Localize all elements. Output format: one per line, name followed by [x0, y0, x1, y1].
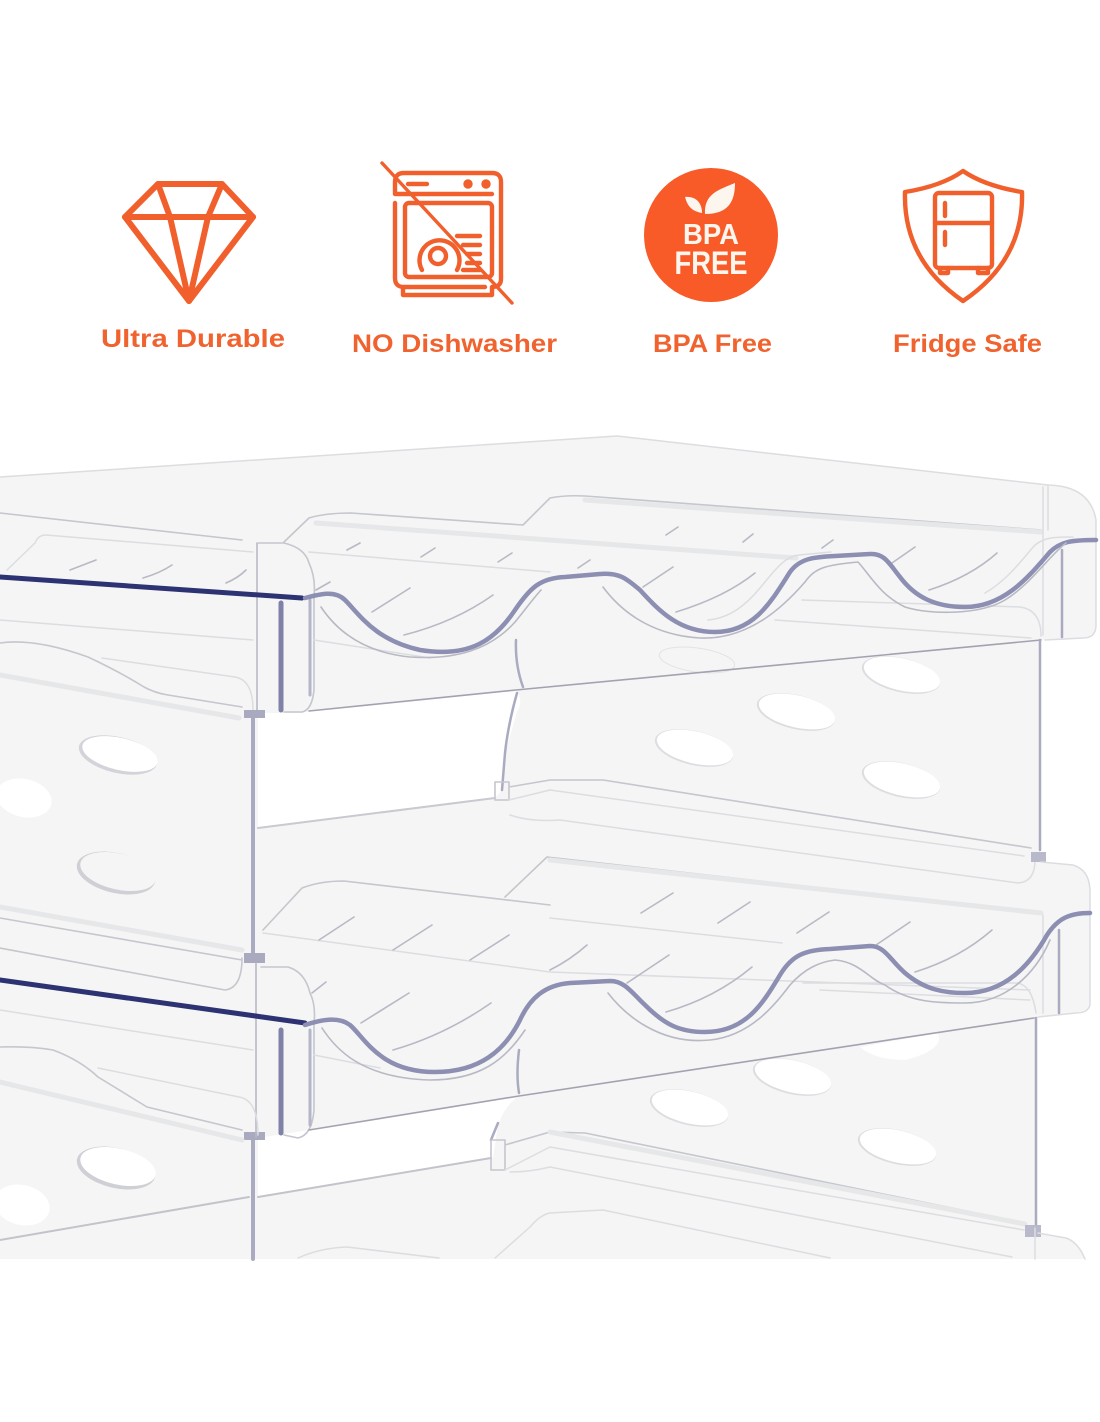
icon: diamond	[125, 184, 253, 301]
label: Ultra Durable: Ultra Durable	[101, 325, 285, 353]
feature icons row	[101, 163, 1042, 358]
top shelf rails and edges	[0, 436, 1096, 718]
top shelf dark front edge	[0, 577, 302, 598]
icon: crossed-out dishwasher	[382, 163, 512, 303]
lower shelf dark front edge	[0, 980, 305, 1023]
icon: BPA free badge	[644, 168, 778, 302]
second tier support walls and tabs	[244, 640, 1046, 1259]
lower shelf wave profile	[305, 913, 1090, 1080]
translucent rack body	[0, 436, 1096, 1259]
lower tier support walls and tabs	[0, 1018, 1085, 1259]
icon: BPA free badge: BPA	[683, 219, 739, 251]
top shelf wave profile	[305, 537, 1096, 658]
label: BPA Free: BPA Free	[653, 330, 772, 358]
ventilation holes	[0, 643, 944, 1231]
label: Fridge Safe: Fridge Safe	[893, 330, 1042, 358]
white gap under lower shelf	[258, 1096, 519, 1197]
lower shelf rails and edges	[0, 857, 1090, 1140]
white gap under top shelf	[258, 690, 520, 828]
icon: fridge shield	[905, 171, 1022, 301]
icon: BPA free badge: FREE	[674, 245, 748, 281]
product photo: stacked clear wine rack	[0, 436, 1096, 1259]
label: NO Dishwasher: NO Dishwasher	[352, 330, 557, 358]
